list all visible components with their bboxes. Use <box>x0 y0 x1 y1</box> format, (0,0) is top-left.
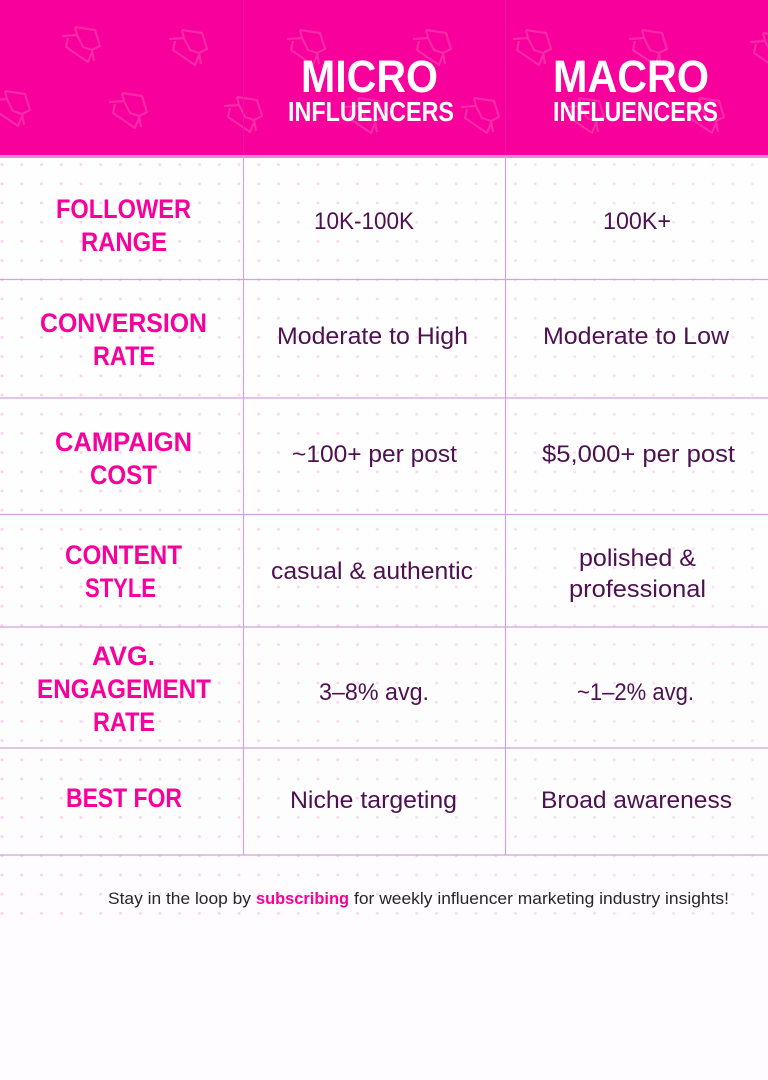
row: conversion rate <box>40 308 730 371</box>
micro value: Niche targeting <box>290 787 457 814</box>
micro value: ~100+ per post <box>292 441 457 468</box>
row: best for <box>66 783 732 814</box>
micro value: 10K-100K <box>314 208 414 235</box>
row: average engagement rate <box>37 641 694 737</box>
macro value: polished & <box>579 545 696 572</box>
row label <box>65 540 182 603</box>
header band <box>0 0 768 158</box>
row: follower range <box>56 194 671 257</box>
row label: BEST FOR <box>66 783 182 813</box>
column heading: macro influencers <box>553 51 718 127</box>
column heading: micro influencers: MICRO <box>301 51 438 102</box>
macro value: ~1–2% avg. <box>577 679 694 706</box>
row label <box>55 427 192 490</box>
micro value: casual & authentic <box>271 558 473 585</box>
column heading: macro influencers: INFLUENCERS <box>553 96 718 127</box>
row label <box>37 641 211 737</box>
row label <box>56 194 191 257</box>
row: content style <box>65 540 706 603</box>
row label: RANGE <box>81 227 167 257</box>
macro value <box>569 545 706 603</box>
footer call to action: Stay in the loop by <box>108 889 252 908</box>
micro value: Moderate to High <box>277 323 468 350</box>
row label: RATE <box>93 341 155 371</box>
header icon pattern <box>0 27 768 133</box>
row label: RATE <box>93 707 155 737</box>
row label: AVG. <box>92 641 155 671</box>
footer call to action: for weekly influencer marketing industry insights! <box>354 889 729 908</box>
column heading: micro influencers: INFLUENCERS <box>288 96 454 127</box>
footer call to action: subscribing <box>256 889 349 908</box>
row label: FOLLOWER <box>56 194 191 224</box>
row label: CONVERSION <box>40 308 207 338</box>
row label: CAMPAIGN <box>55 427 192 457</box>
row: campaign cost <box>55 427 735 490</box>
dotted background pattern <box>0 160 768 926</box>
row label: ENGAGEMENT <box>37 674 211 704</box>
row label: STYLE <box>85 573 156 603</box>
macro value: $5,000+ per post <box>542 441 735 468</box>
macro value: 100K+ <box>603 208 671 235</box>
macro value: Broad awareness <box>541 787 732 814</box>
row label: CONTENT <box>65 540 182 570</box>
micro value: 3–8% avg. <box>319 679 429 706</box>
column heading: macro influencers: MACRO <box>553 51 709 102</box>
row label <box>40 308 207 371</box>
macro value: Moderate to Low <box>543 323 730 350</box>
macro value: professional <box>569 576 706 603</box>
row label: COST <box>90 460 157 490</box>
table grid lines <box>0 0 768 855</box>
column heading: micro influencers <box>288 51 454 127</box>
